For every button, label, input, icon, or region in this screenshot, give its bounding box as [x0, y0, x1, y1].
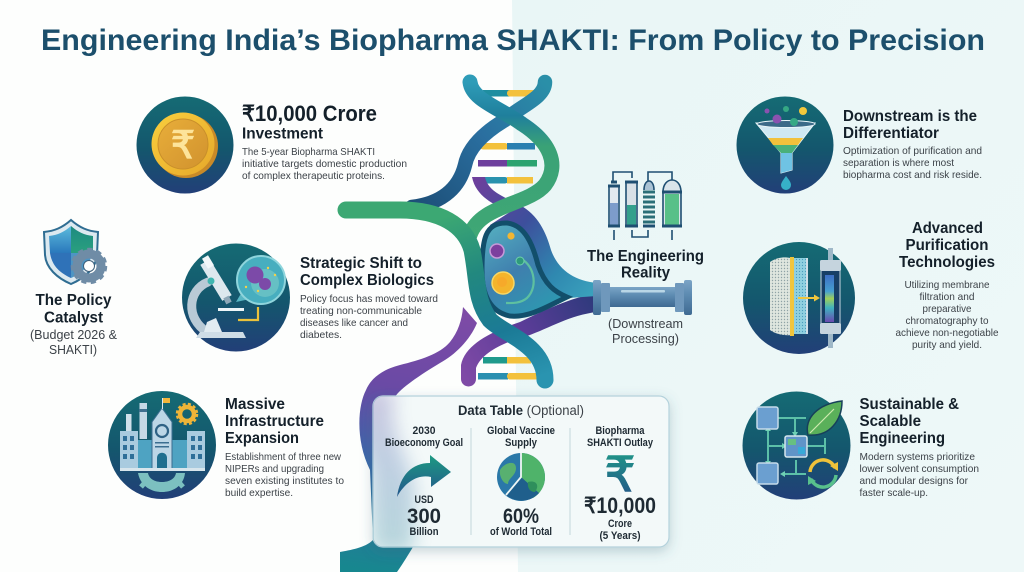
- upper purple and teal band around cell: [472, 177, 597, 300]
- cell: [482, 223, 567, 316]
- icon: rupee coin: [136, 96, 234, 194]
- description: filtration and: [920, 291, 975, 303]
- description: [860, 451, 979, 499]
- description: Establishment of three new: [225, 451, 341, 463]
- description: NIPERs and upgrading: [225, 463, 324, 475]
- icon: microscope: [182, 244, 290, 352]
- description: and modular designs for: [860, 475, 968, 487]
- subheading: Processing): [612, 332, 679, 346]
- description: purity and yield.: [912, 339, 982, 351]
- heading: Complex Biologics: [300, 272, 434, 289]
- title: Engineering India’s Biopharma SHAKTI: From Policy to Precision: [41, 24, 985, 57]
- green and teal strand: [346, 210, 545, 380]
- heading: [587, 248, 704, 282]
- description: chromatography to: [906, 315, 989, 327]
- heading: Differentiator: [843, 125, 939, 142]
- pipe: [593, 280, 692, 315]
- icon: growth arrow: [397, 455, 451, 497]
- heading: Scalable: [860, 413, 921, 430]
- heading: [225, 396, 324, 447]
- description: Modern systems prioritize: [860, 451, 975, 463]
- heading: Engineering: [860, 430, 945, 447]
- icon: rupee symbol: ₹: [605, 449, 635, 502]
- panel: downstream differentiator: [736, 96, 982, 194]
- icon: rupee coin: ₹: [171, 125, 195, 167]
- column: shakti outlay: (5 Years): [600, 530, 641, 542]
- heading: Advanced: [912, 220, 983, 237]
- heading: ₹10,000 Crore: [242, 101, 377, 126]
- column: shakti outlay: Biopharma: [596, 425, 645, 437]
- heading: [300, 255, 434, 289]
- description: [242, 146, 407, 182]
- description: preparative: [922, 303, 972, 315]
- subheading: [30, 328, 118, 357]
- column: shakti outlay: ₹10,000: [584, 493, 656, 518]
- column: bioeconomy goal: 300: [407, 505, 441, 528]
- subheading: [608, 317, 683, 346]
- column: shakti outlay: SHAKTI Outlay: [587, 437, 654, 449]
- heading: Purification: [906, 237, 988, 254]
- description: diabetes.: [300, 329, 342, 341]
- description: diseases like cancer and: [300, 317, 408, 329]
- column: global vaccine supply: 60%: [503, 505, 539, 528]
- icon: institute building and gears: [108, 391, 216, 499]
- description: achieve non-negotiable: [896, 327, 999, 339]
- lower purple band: [461, 293, 597, 387]
- heading: Strategic Shift to: [300, 255, 422, 272]
- description: Utilizing membrane: [904, 279, 990, 291]
- description: initiative targets domestic production: [242, 158, 407, 170]
- subheading: (Downstream: [608, 317, 683, 331]
- description: of complex therapeutic proteins.: [242, 170, 385, 182]
- heading: The Policy: [36, 292, 112, 309]
- column: bioeconomy goal: 2030: [412, 425, 436, 437]
- heading: [36, 292, 112, 326]
- subheading: (Budget 2026 &: [30, 328, 118, 342]
- description: seven existing institutes to: [225, 475, 344, 487]
- description: faster scale-up.: [860, 487, 928, 499]
- panel: 10,000 crore investment: [136, 96, 407, 194]
- subheading: Investment: [242, 126, 324, 142]
- blurred ribbon seen through card: [373, 396, 424, 547]
- ribbon: purple to teal sweep: [340, 307, 477, 572]
- icon: process columns: [608, 172, 682, 240]
- panel: data table: [357, 388, 669, 552]
- description: [300, 293, 438, 341]
- heading: Infrastructure: [225, 413, 324, 430]
- description: Policy focus has moved toward: [300, 293, 438, 305]
- panel: policy catalyst: [30, 220, 118, 357]
- column: global vaccine supply: [487, 425, 555, 538]
- description: lower solvent consumption: [860, 463, 979, 475]
- description: [843, 145, 982, 181]
- description: treating non-communicable: [300, 305, 422, 317]
- icon: globe with pie section: [497, 453, 545, 501]
- column: global vaccine supply: Global Vaccine: [487, 425, 555, 437]
- subheading: SHAKTI): [49, 343, 97, 357]
- column: bioeconomy goal: [385, 425, 463, 538]
- heading: Sustainable &: [860, 396, 959, 413]
- heading: Expansion: [225, 430, 299, 447]
- heading: Catalyst: [44, 310, 104, 326]
- heading: The Engineering: [587, 248, 704, 265]
- central DNA helix and cell: [340, 82, 692, 572]
- icon: modular blocks, leaf, recycle: [742, 392, 850, 500]
- panel: massive infrastructure: [108, 391, 344, 499]
- description: biopharma cost and risk reside.: [843, 169, 982, 181]
- panel: advanced purification: [743, 220, 999, 354]
- panel: strategic shift: [182, 244, 438, 352]
- panel: sustainable and scalable: [742, 392, 979, 500]
- heading: Downstream is the: [843, 108, 977, 125]
- description: Optimization of purification and: [843, 145, 982, 157]
- blue strand: [412, 82, 545, 207]
- column: bioeconomy goal: Bioeconomy Goal: [385, 437, 463, 449]
- icon: funnel: [736, 96, 834, 194]
- column: bioeconomy goal: Billion: [410, 526, 439, 538]
- description: separation is where most: [843, 157, 954, 169]
- column: global vaccine supply: of World Total: [490, 526, 552, 538]
- description: [896, 279, 999, 351]
- column: bioeconomy goal: USD: [414, 494, 434, 506]
- heading: Massive: [225, 396, 285, 413]
- icon: membrane and chromatography column: [743, 242, 855, 354]
- card background: [373, 396, 669, 547]
- icon: shield and gear: [44, 220, 105, 284]
- description: build expertise.: [225, 487, 293, 499]
- column: global vaccine supply: Supply: [505, 437, 538, 449]
- ladder rungs: [478, 90, 539, 380]
- heading: [860, 396, 959, 447]
- heading: Reality: [621, 264, 670, 282]
- column: shakti outlay: Crore: [608, 518, 632, 530]
- heading: [843, 108, 977, 142]
- column: shakti outlay: [584, 425, 656, 542]
- heading: [899, 220, 995, 271]
- front strand top: [470, 82, 552, 235]
- panel: the engineering reality: [587, 172, 704, 346]
- description: The 5-year Biopharma SHAKTI: [242, 146, 375, 158]
- description: [225, 451, 344, 499]
- heading: Technologies: [899, 254, 995, 271]
- card title: Data Table (Optional): [458, 403, 584, 418]
